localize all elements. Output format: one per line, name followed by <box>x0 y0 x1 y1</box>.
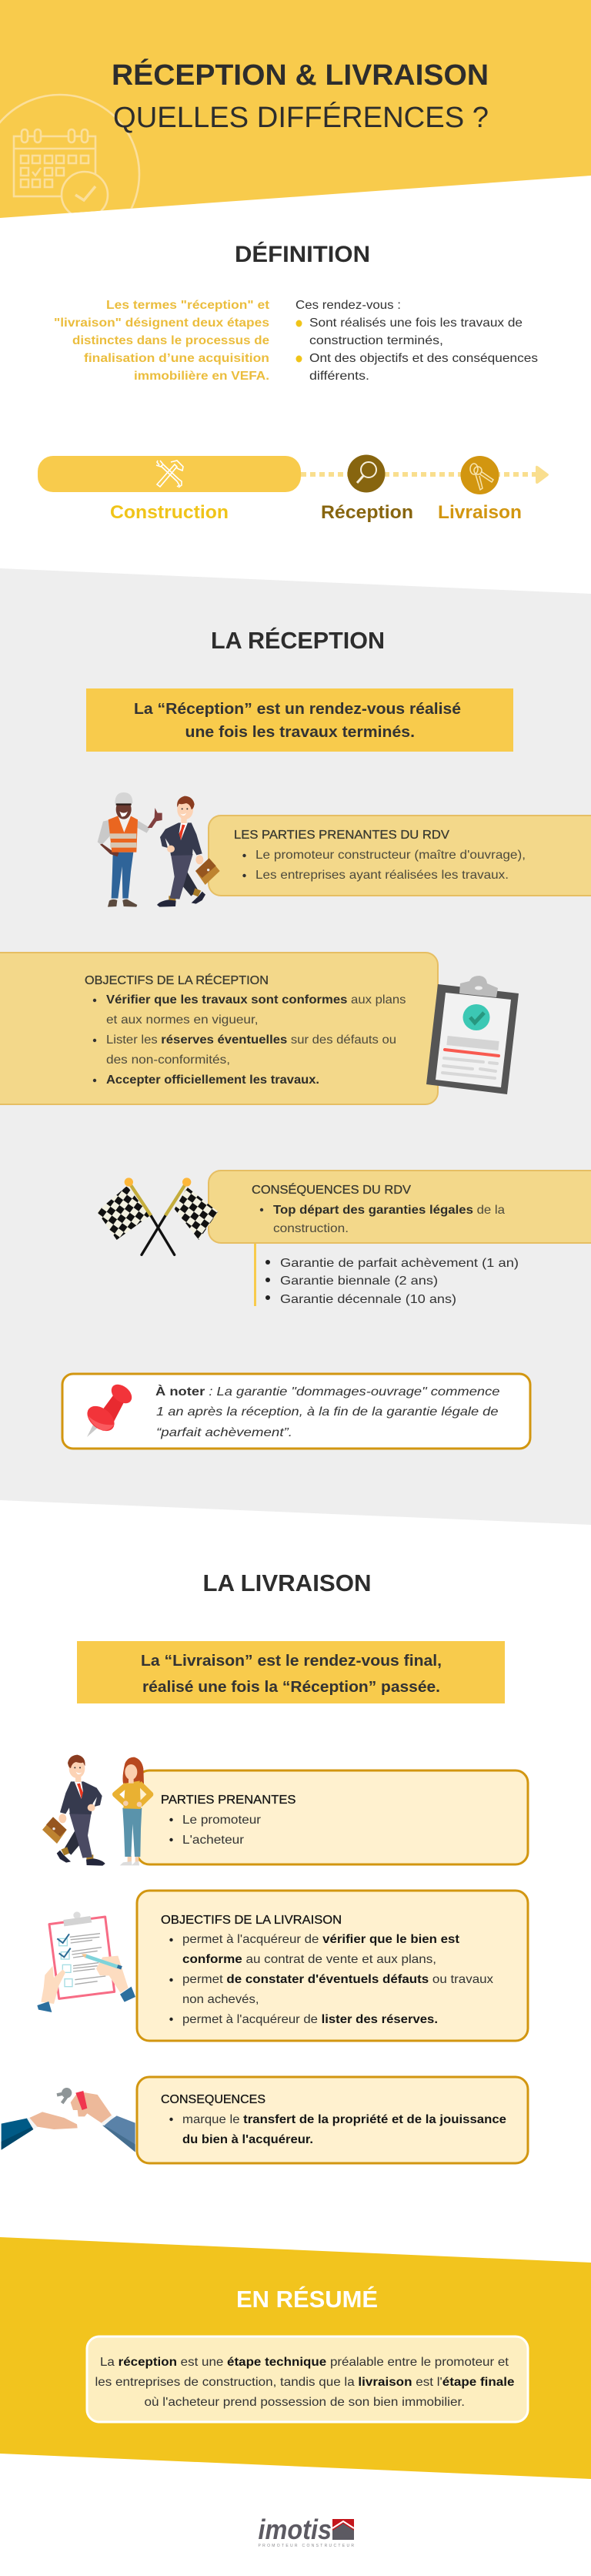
title line 1: RÉCEPTION & LIVRAISON <box>112 58 489 92</box>
callout: définition livraison: réalisé une fois la “Réception” passée. <box>142 1679 440 1696</box>
panel: parties prenantes du rdv: Le promoteur constructeur (maître d'ouvrage), <box>255 849 526 862</box>
panel: parties prenantes du rdv <box>209 816 591 896</box>
timeline <box>38 454 549 523</box>
text block: ces rendez-vous: construction terminés, <box>309 334 443 347</box>
construction bar <box>38 456 301 492</box>
panel: parties prenantes du rdv: LES PARTIES PRENANTES DU RDV <box>234 829 449 842</box>
illustration: promoteur et acheteuse <box>42 1755 151 1866</box>
text block: definition intro <box>54 299 270 383</box>
callout: définition livraison <box>77 1641 505 1703</box>
illustration: checklist in hands <box>37 1911 135 2012</box>
callout: définition livraison: La “Livraison” est le rendez-vous final, <box>141 1653 442 1670</box>
panel: objectifs de la livraison: non achevés, <box>182 1993 259 2006</box>
label: construction: Construction <box>110 502 229 523</box>
panel: conséquences du rdv: Garantie de parfait achèvement (1 an) <box>280 1257 519 1270</box>
icon: tools <box>156 461 183 487</box>
illustration: remise des clés <box>2 2088 135 2152</box>
summary box: où l'acheteur prend possession de son bien immobilier. <box>145 2396 465 2409</box>
text block: ces rendez-vous: différents. <box>309 370 369 383</box>
illustration: ouvrier et promoteur <box>98 792 220 907</box>
logo: imotis: PROMOTEUR CONSTRUCTEUR <box>259 2544 354 2548</box>
panel: objectifs de la livraison: permet de constater d'éventuels défauts ou travaux <box>182 1973 493 1986</box>
panel: conséquences du rdv <box>209 1171 591 1306</box>
text block: definition intro: Les termes "réception" et <box>106 299 270 312</box>
worker <box>98 792 162 907</box>
summary box <box>87 2336 528 2422</box>
icon: calendar with check <box>0 94 140 213</box>
heading: en résumé: EN RÉSUMÉ <box>236 2286 378 2313</box>
panel: objectifs de la livraison: permet à l'acquéreur de lister des réserves. <box>182 2013 438 2026</box>
heading: la réception: LA RÉCEPTION <box>211 627 385 654</box>
timeline stem <box>254 1243 256 1306</box>
text block: ces rendez-vous: Ces rendez-vous : <box>296 299 401 312</box>
panel: objectifs de la livraison: conforme au contrat de vente et aux plans, <box>182 1953 436 1966</box>
panel: parties prenantes: Le promoteur <box>182 1814 262 1827</box>
panel: objectifs de la réception <box>0 953 438 1104</box>
text block: ces rendez-vous: Sont réalisés une fois les travaux de <box>309 317 523 330</box>
panel: objectifs de la réception: Vérifier que les travaux sont conformes aux plans <box>106 993 406 1007</box>
panel: objectifs de la réception: et aux normes en vigueur, <box>106 1013 259 1027</box>
panel: objectifs de la réception: OBJECTIFS DE LA RÉCEPTION <box>85 973 269 987</box>
text block: ces rendez-vous <box>296 299 538 383</box>
text block: ces rendez-vous: Ont des objectifs et des conséquences <box>309 352 538 365</box>
icon: clipboard <box>426 976 519 1094</box>
panel: conséquences du rdv: CONSÉQUENCES DU RDV <box>252 1182 411 1197</box>
icon: keys <box>470 464 493 490</box>
callout: à noter: “parfait achèvement”. <box>156 1426 292 1439</box>
callout: définition réception <box>86 688 513 752</box>
callout: à noter: 1 an après la réception, à la fin de la garantie légale de <box>156 1405 499 1419</box>
arrow head <box>536 466 549 484</box>
panel: parties prenantes du rdv: Les entreprises ayant réalisées les travaux. <box>255 869 509 882</box>
text block: definition intro: "livraison" désignent deux étapes <box>54 317 269 330</box>
icon: push pin <box>82 1381 135 1437</box>
panel: en résumé <box>0 2237 591 2479</box>
heading: définition: DÉFINITION <box>235 241 370 267</box>
panel: conséquences <box>137 2077 528 2163</box>
title line 2: QUELLES DIFFÉRENCES ? <box>113 101 489 134</box>
panel: parties prenantes: PARTIES PRENANTES <box>161 1794 296 1807</box>
text block: definition intro: distinctes dans le processus de <box>72 334 269 347</box>
panel: conséquences du rdv: construction. <box>273 1222 349 1235</box>
callout: définition réception: une fois les travaux terminés. <box>185 724 415 741</box>
panel: objectifs de la livraison <box>137 1891 528 2041</box>
label: réception: Réception <box>321 502 413 523</box>
heading: la livraison: LA LIVRAISON <box>203 1569 371 1596</box>
icon: magnifier <box>357 462 376 483</box>
text block: definition intro: finalisation d’une acquisition <box>84 352 269 365</box>
panel: conséquences: CONSEQUENCES <box>161 2093 265 2106</box>
panel: conséquences du rdv: Garantie biennale (2 ans) <box>280 1275 438 1288</box>
panel: parties prenantes <box>137 1770 528 1864</box>
callout: définition réception: La “Réception” est un rendez-vous réalisé <box>134 701 461 718</box>
panel: hero header <box>0 0 591 218</box>
panel: la réception <box>0 568 591 1525</box>
livraison circle <box>460 456 499 494</box>
buyer <box>115 1757 151 1865</box>
panel: objectifs de la livraison: permet à l'acquéreur de vérifier que le bien est <box>182 1933 460 1946</box>
summary box: les entreprises de construction, tandis que la livraison est l'étape finale <box>95 2376 515 2389</box>
panel: conséquences: du bien à l'acquéreur. <box>182 2133 313 2146</box>
reception circle <box>348 454 385 493</box>
logo: imotis: imotis <box>259 2514 332 2545</box>
panel: objectifs de la réception: Accepter officiellement les travaux. <box>106 1074 319 1087</box>
label: livraison: Livraison <box>438 502 522 523</box>
panel: objectifs de la réception: Lister les réserves éventuelles sur des défauts ou <box>106 1033 396 1047</box>
panel: parties prenantes: L'acheteur <box>182 1834 245 1847</box>
callout: à noter: À noter : La garantie "dommages-ouvrage" commence <box>155 1384 500 1399</box>
summary box: La réception est une étape technique préalable entre le promoteur et <box>100 2356 509 2369</box>
panel: conséquences du rdv: Top départ des garanties légales de la <box>273 1204 505 1217</box>
panel: objectifs de la réception: des non-conformités, <box>106 1054 230 1067</box>
panel: conséquences: marque le transfert de la propriété et de la jouissance <box>182 2113 506 2126</box>
text block: definition intro: immobilière en VEFA. <box>134 370 269 383</box>
panel: conséquences du rdv: Garantie décennale (10 ans) <box>280 1293 456 1306</box>
callout: à noter <box>62 1374 530 1449</box>
panel: objectifs de la livraison: OBJECTIFS DE LA LIVRAISON <box>161 1914 342 1927</box>
icon: checkered flags <box>97 1177 218 1255</box>
